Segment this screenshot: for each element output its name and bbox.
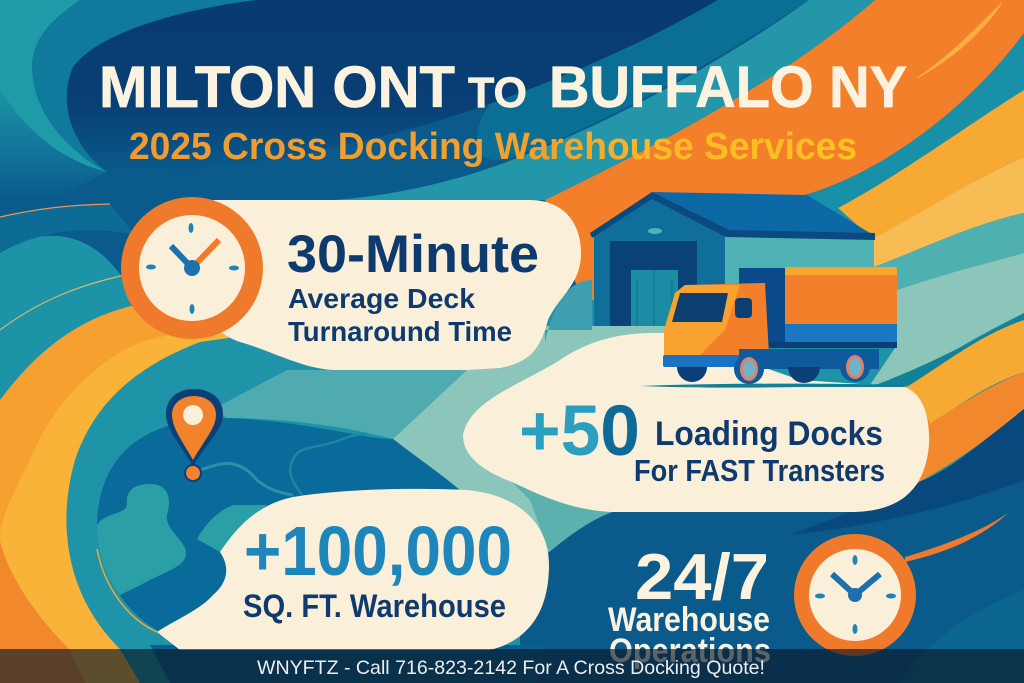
icon: clock 24/7 [794, 512, 1009, 656]
text: average deck turnaround time: Turnaround Time [288, 316, 512, 347]
text: warehouse operations: Warehouse [608, 601, 770, 639]
title: TO [468, 69, 527, 117]
panel: warehouse size [157, 489, 549, 650]
panel: 30-minute turnaround [192, 200, 581, 370]
stat: 24/7: 24/7 [635, 540, 769, 613]
title [99, 55, 907, 120]
text: loading docks: For FAST Transters [634, 453, 885, 488]
icon: clock orange [121, 197, 263, 339]
subtitle: 2025 Cross Docking Warehouse Services [129, 126, 857, 168]
heading: 30-Minute: 30-Minute [287, 225, 539, 284]
warehouse illustration [590, 192, 875, 327]
footer bar [0, 649, 1024, 683]
footer text: WNYFTZ - Call 716-823-2142 For A Cross Docking Quote! [257, 657, 765, 679]
title: BUFFALO NY [549, 55, 907, 120]
stat: +50: +50 [519, 392, 640, 471]
globe map [97, 418, 465, 650]
text: loading docks: Loading Docks [655, 415, 883, 453]
text: sq ft warehouse: SQ. FT. Warehouse [243, 588, 506, 624]
title: MILTON ONT [99, 55, 455, 120]
text: average deck turnaround time: Average Deck [288, 283, 475, 314]
panel: loading docks [463, 333, 929, 512]
ground shadow [640, 384, 905, 388]
icon: delivery truck [663, 267, 897, 384]
text: warehouse operations: Operations [609, 632, 771, 670]
stat: +100,000: +100,000 [244, 512, 512, 590]
icon: map pin [166, 389, 223, 481]
